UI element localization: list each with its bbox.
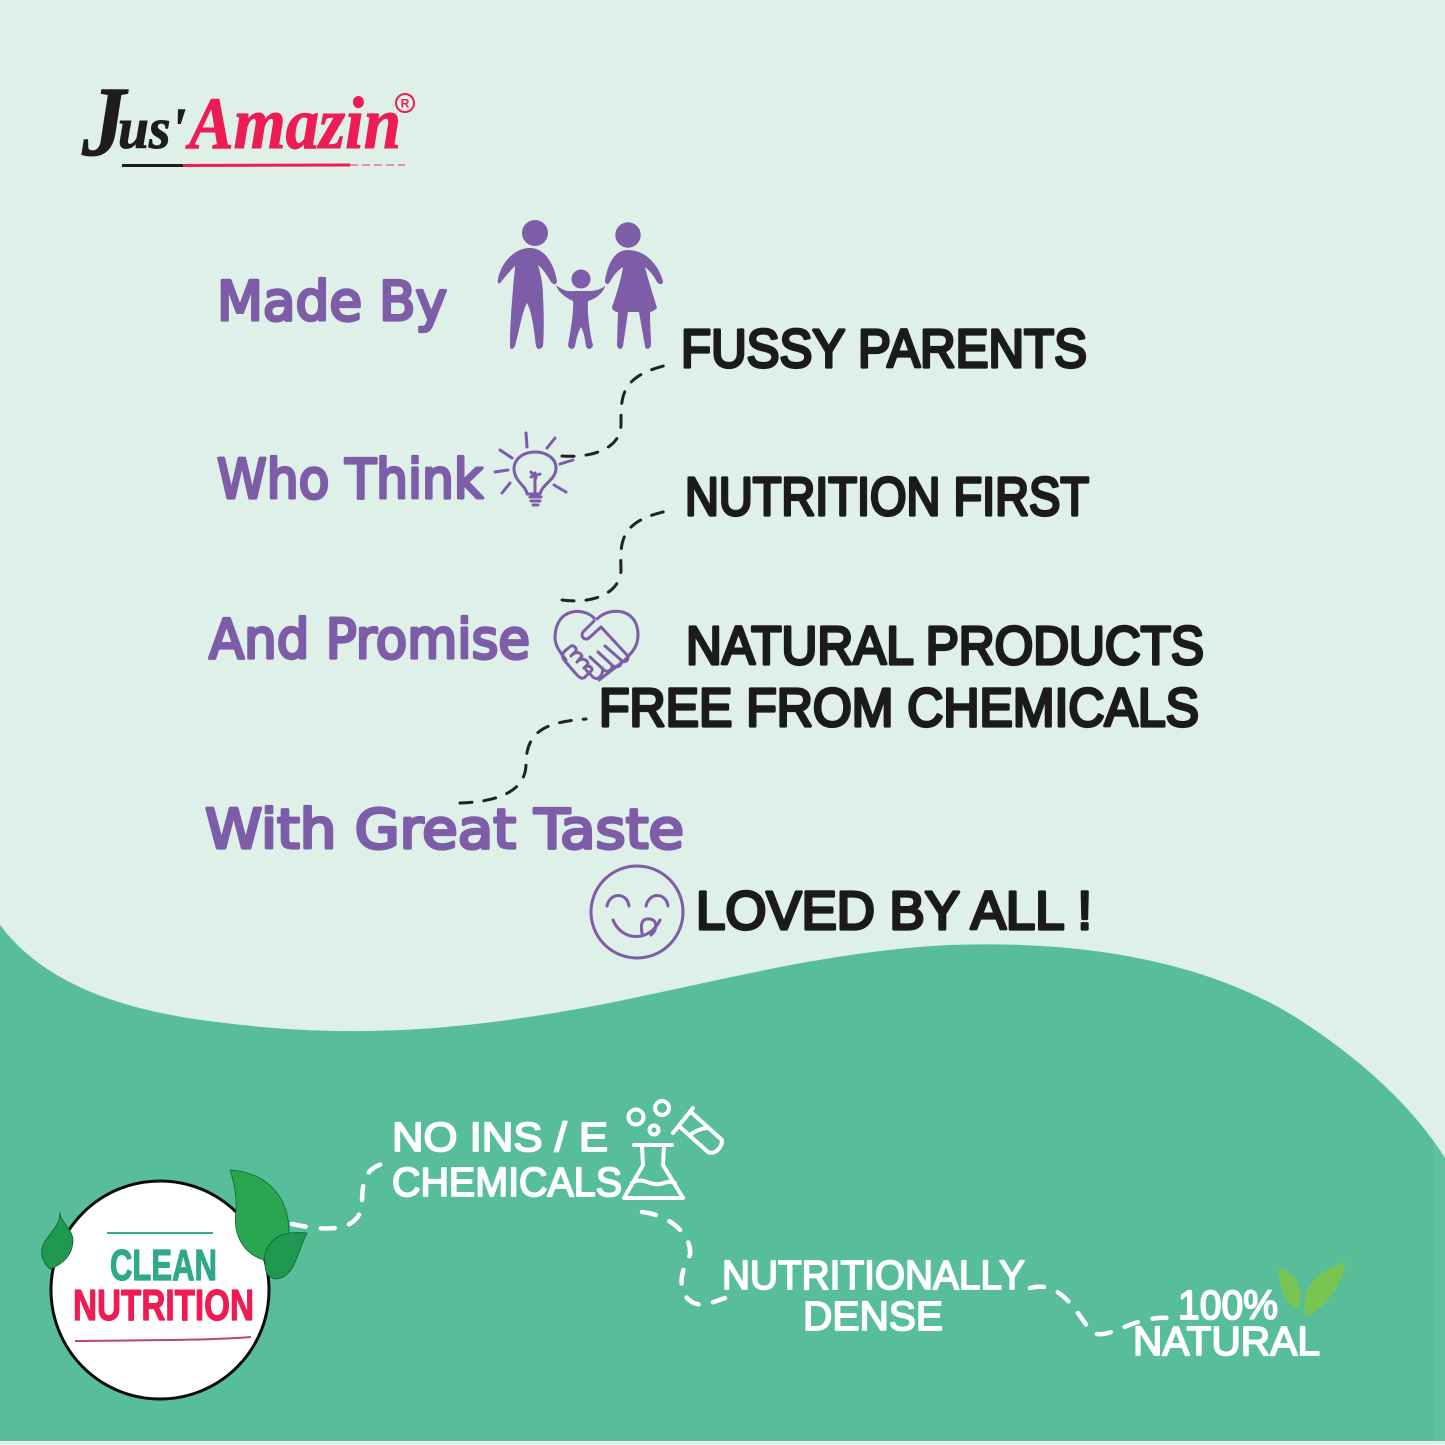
badge: clean nutrition: NUTRITION [73,1281,254,1330]
right edge strip [1433,0,1445,1441]
label: 100%: 100% [1178,1282,1278,1328]
label: NUTRITIONALLY: NUTRITIONALLY [722,1252,1025,1298]
label: NO INS / E: NO INS / E [392,1114,608,1160]
connector: badge to no chemicals [292,1162,392,1229]
icon: flask and test tube [624,1101,722,1198]
heading: With Great Taste: With Great Taste [205,798,684,861]
connector: who think to fussy parents [562,364,672,456]
logo: J [81,66,129,177]
label: LOVED BY ALL: LOVED BY ALL ! [696,881,1092,941]
label: NATURAL: NATURAL [1133,1318,1320,1364]
logo: R [401,96,410,110]
green wave background [0,925,1445,1441]
logo: Amazin [185,83,401,165]
logo [81,66,414,177]
badge: clean nutrition: CLEAN [110,1241,217,1290]
heading: Made By: Made By [217,270,447,333]
icon: badge leaves [42,1170,307,1279]
label: DENSE: DENSE [803,1293,943,1339]
badge: clean nutrition [51,1181,269,1399]
icon: light bulb [495,433,573,505]
heading: And Promise: And Promise [209,608,530,671]
icon: natural leaves [1278,1260,1346,1316]
icon: family [498,220,663,349]
icon: smiley with tongue [591,866,683,958]
icon: handshake heart [555,611,638,680]
label: CHEMICALS: CHEMICALS [392,1159,622,1205]
logo: us' [118,96,186,161]
connector: taste to free from chemicals [460,719,586,803]
connector: promise to nutrition first [562,510,672,601]
label: FREE FROM CHEMICALS: FREE FROM CHEMICALS [599,678,1199,738]
connector: nutritionally dense to natural [1030,1287,1170,1334]
label: FUSSY PARENTS: FUSSY PARENTS [681,319,1087,379]
label: NATURAL PRODUCTS: NATURAL PRODUCTS [686,616,1204,676]
heading: Who Think: Who Think [217,448,484,511]
label: NUTRITION FIRST: NUTRITION FIRST [685,467,1089,527]
connector: chemicals to nutritionally dense [642,1212,725,1305]
